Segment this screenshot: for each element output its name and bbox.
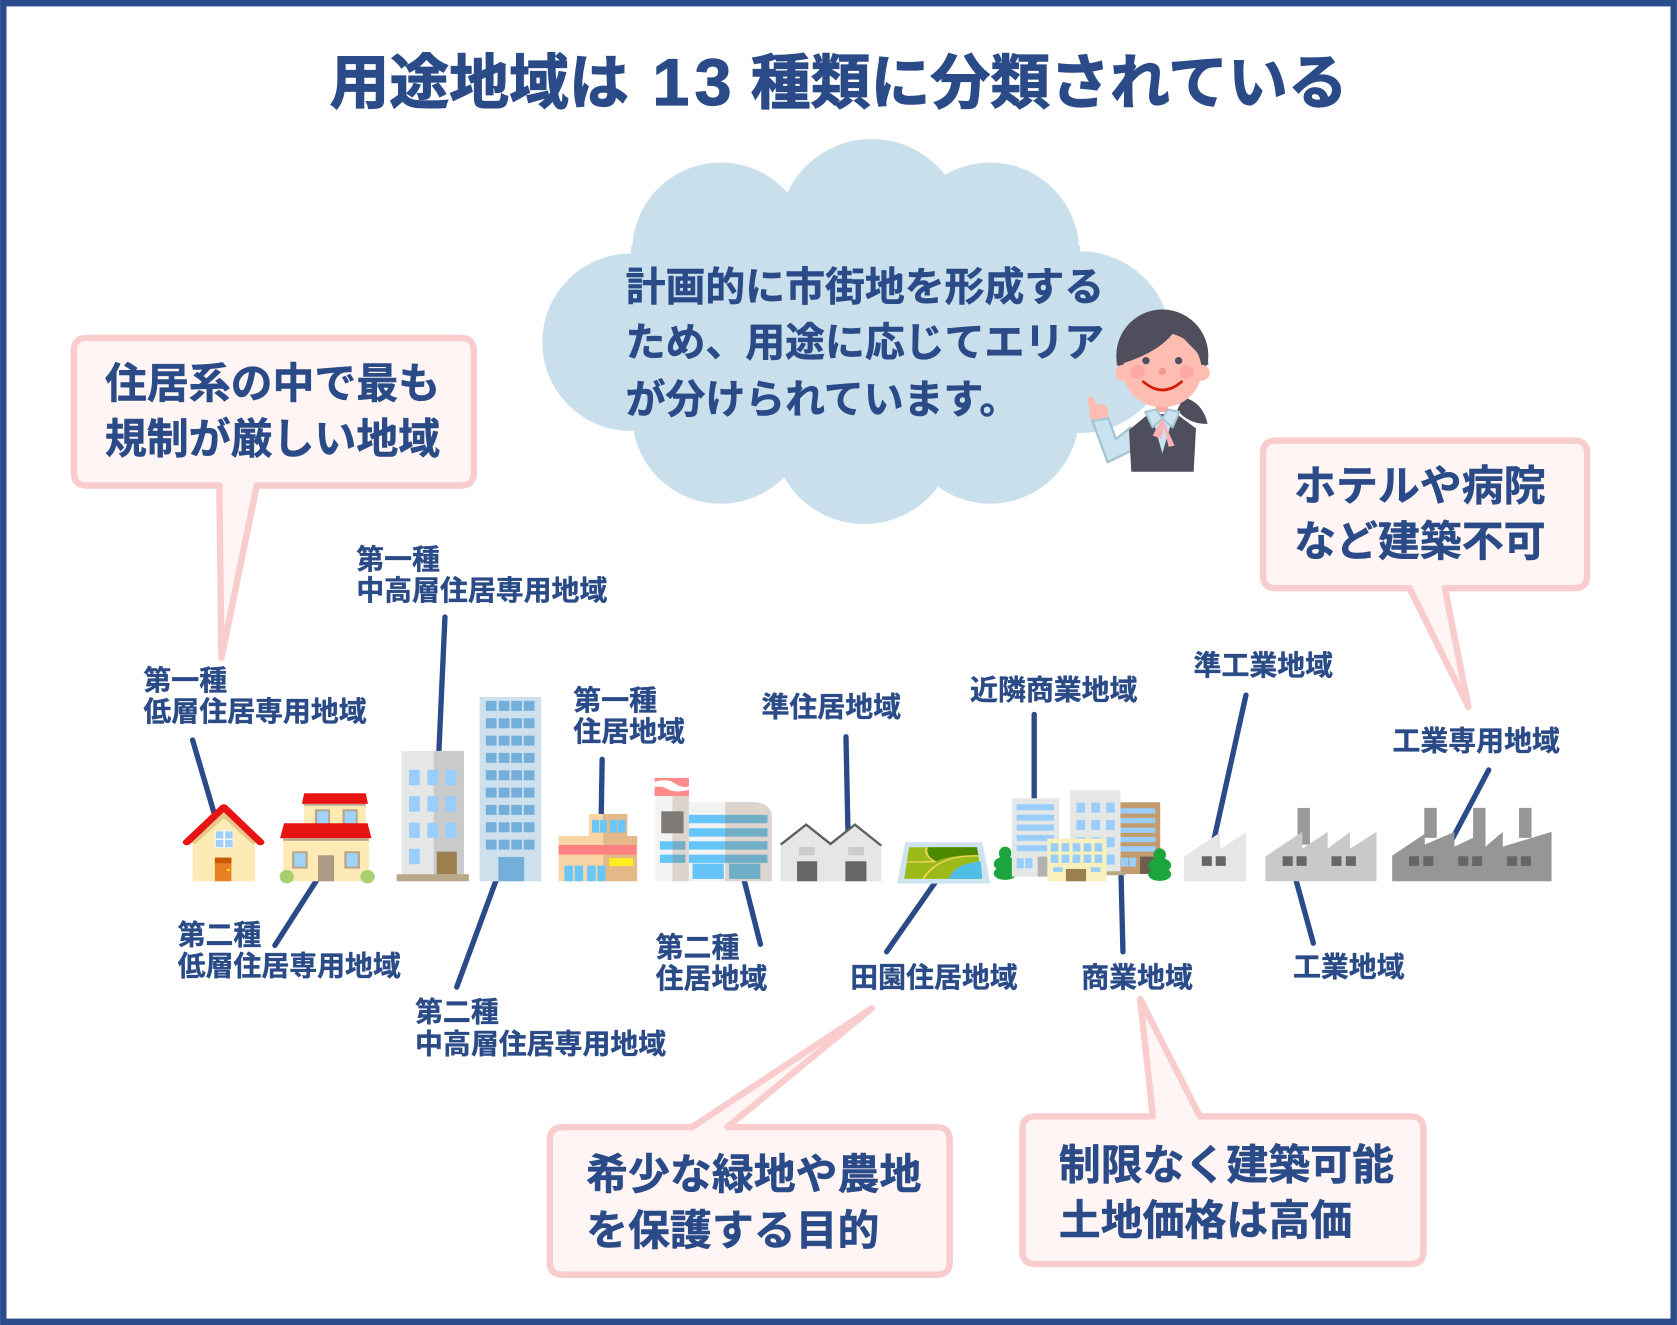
label: commercial: 商業地域 [1081,962,1193,993]
label: first low-rise: 低層住居専用地域 [143,696,367,727]
buildings right half [781,790,1552,884]
callout: rural residential: を保護する目的 [586,1207,879,1254]
title: 種類に分類されている [751,50,1348,117]
buildings left half [187,697,772,883]
ponytail [1177,397,1208,424]
callout: industrial exclusive: ホテルや病院 [1294,462,1546,509]
hair back [1116,309,1208,373]
label: second residential: 住居地域 [656,963,767,994]
nose [1159,368,1166,375]
label: second mid-high: 中高層住居専用地域 [415,1028,666,1059]
icon: detached house [187,807,260,881]
icon: shop building [559,814,637,881]
icon: commercial district [1012,790,1160,881]
hand [1088,396,1109,420]
cloud text: ため、用途に応じてエリア [626,321,1104,365]
label: second low-rise: 第二種 [178,919,261,950]
label: industrial exclusive: 工業専用地域 [1392,726,1560,757]
neck [1156,403,1168,412]
icon: small light factory [1184,832,1246,881]
mouth [1143,382,1182,390]
collar [1145,409,1179,427]
label: first low-rise: 第一種 [143,665,227,696]
icon: two-storey house [280,793,375,883]
cloud text: が分けられています。 [626,378,1019,422]
icon: shopping mall [655,778,772,881]
callout: industrial exclusive: など建築不可 [1294,518,1546,565]
icon: medium factory [1265,808,1376,881]
callout: commercial: 制限なく建築可能 [1059,1142,1394,1189]
label: second mid-high: 第二種 [415,996,499,1027]
icon: presenter woman [1088,309,1210,472]
icon: quasi-residential gabled houses [781,825,881,881]
leader lines [193,617,1489,987]
icon: left tree [994,847,1017,880]
icon: mid-rise building [397,751,469,881]
icon: right tree [1148,848,1171,881]
label: second low-rise: 低層住居専用地域 [178,950,401,981]
ears [1115,365,1131,381]
label: second residential: 第二種 [656,932,739,963]
callout: rural residential: 希少な緑地や農地 [586,1151,921,1198]
callout: first low-rise: 住居系の中で最も [105,360,440,407]
icon: farmland map [897,842,990,884]
cloud text [626,266,1104,422]
label: neighbourhood commercial: 近隣商業地域 [970,674,1138,705]
icon: tower [480,697,541,881]
title: 用途地域は [329,50,629,117]
cloud text: 計画的に市街地を形成する [626,266,1104,310]
label: quasi industrial: 準工業地域 [1194,650,1333,681]
callout: first low-rise [74,338,474,658]
label: industrial: 工業地域 [1293,951,1405,982]
callout: industrial exclusive [1263,441,1587,707]
speech cloud [542,139,1171,524]
label: first residential: 第一種 [573,685,657,716]
title: 13 [652,46,737,120]
torso [1129,414,1196,472]
label: rural residential: 田園住居地域 [850,962,1018,993]
label: first mid-high: 第一種 [356,544,440,575]
callout: commercial [1022,999,1423,1264]
label: quasi residential: 準住居地域 [762,692,901,723]
face [1123,333,1202,407]
callout: commercial: 土地価格は高価 [1059,1197,1352,1244]
arm [1092,418,1131,462]
label: first residential: 住居地域 [573,716,685,747]
eyes [1142,357,1150,364]
label: first mid-high: 中高層住居専用地域 [356,575,607,606]
icon: large factory [1392,808,1552,881]
callout: rural residential [550,1008,950,1275]
bangs [1117,320,1208,365]
cheeks [1131,365,1145,379]
shirt [1153,418,1173,453]
callout: first low-rise: 規制が厳しい地域 [105,415,440,462]
tie [1153,418,1175,447]
